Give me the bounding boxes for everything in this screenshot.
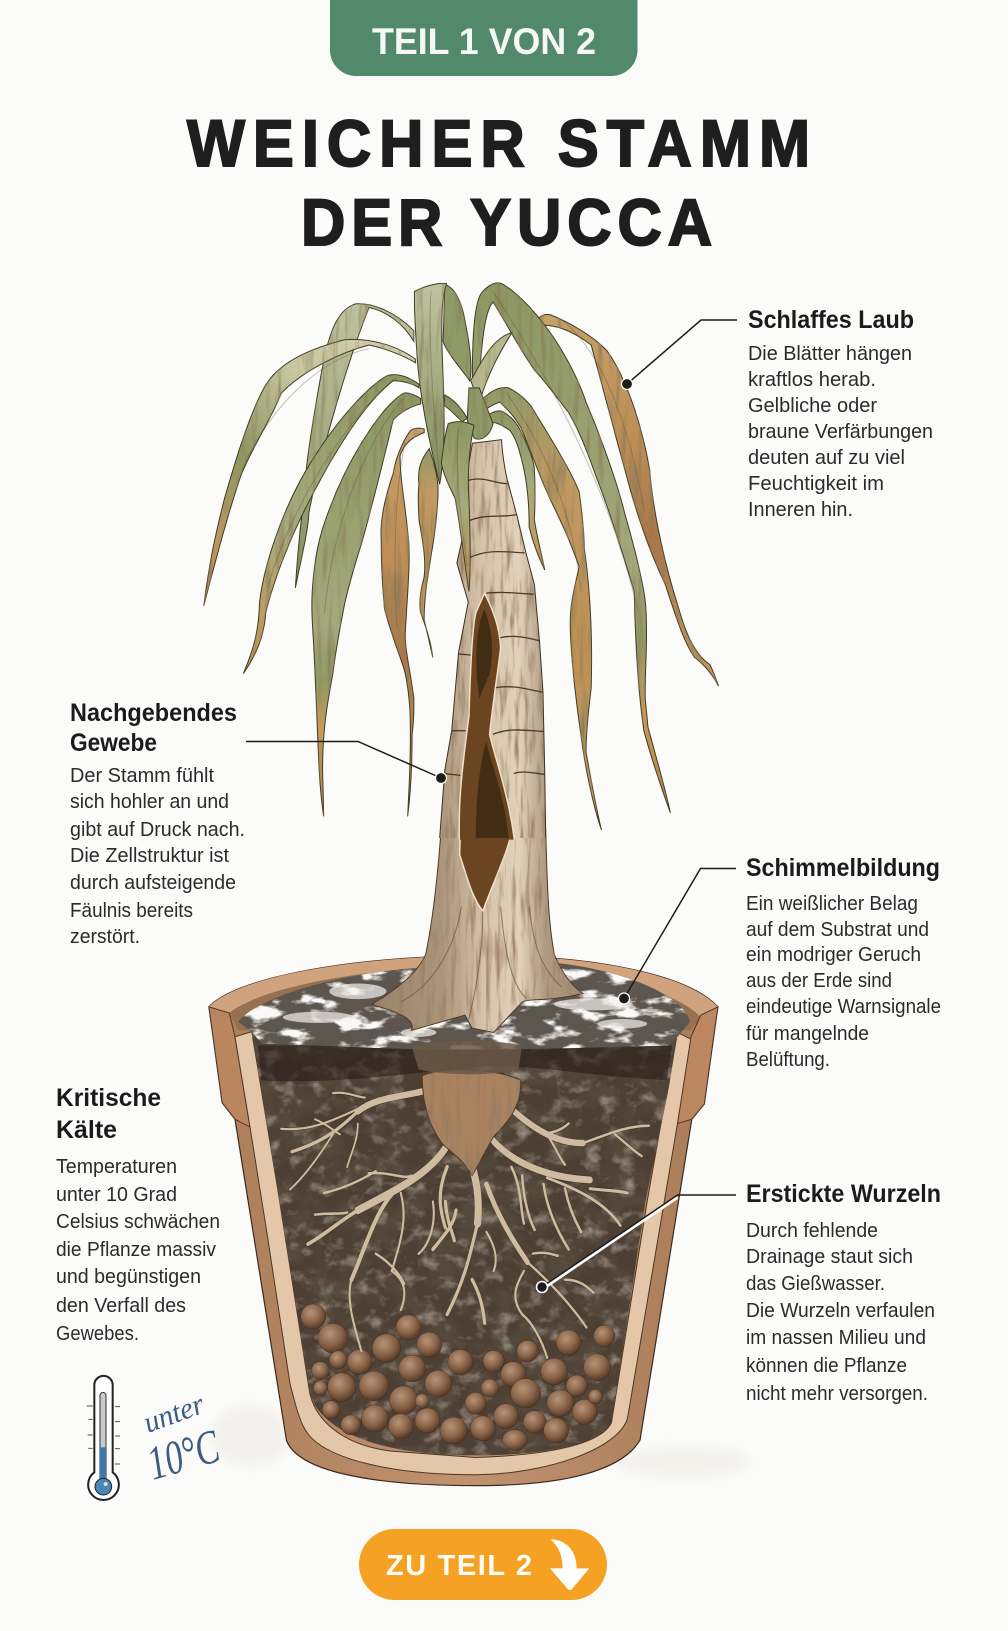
far right brown leaf xyxy=(534,314,719,686)
title: WEICHER STAMM xyxy=(187,106,810,180)
left rim section xyxy=(209,1007,250,1127)
callout: Schimmelbildung: ein modriger Geruch xyxy=(746,944,921,966)
callout: Schimmelbildung: eindeutige Warnsignale xyxy=(746,996,941,1018)
button: Zu Teil 2 xyxy=(359,1529,607,1600)
soil dark band xyxy=(258,1045,672,1081)
button: Zu Teil 2: ZU TEIL 2 xyxy=(386,1550,532,1582)
stem base in soil xyxy=(411,1041,522,1074)
upright back center leaf xyxy=(443,284,471,381)
callout: Kritische Kälte: und begünstigen xyxy=(56,1266,201,1288)
callout: Nachgebendes Gewebe xyxy=(70,699,446,948)
callout: Schlaffes Laub: Feuchtigkeit im xyxy=(748,473,884,495)
small hanging leaf xyxy=(418,449,438,657)
callout: Nachgebendes Gewebe: Die Zellstruktur ist xyxy=(70,845,229,867)
callout: Erstickte Wurzeln: Die Wurzeln verfaulen xyxy=(746,1300,935,1322)
callout: Kritische Kälte: den Verfall des xyxy=(56,1295,186,1317)
callout: Schlaffes Laub: Gelbliche oder xyxy=(748,395,877,417)
center folded leaf xyxy=(414,283,447,484)
callout: Nachgebendes Gewebe: Nachgebendes xyxy=(70,699,237,727)
leaf veins xyxy=(242,291,645,627)
callout: Nachgebendes Gewebe: zerstört. xyxy=(70,926,140,948)
callout: Schlaffes Laub xyxy=(622,306,933,521)
illustration: yucca crown and trunk xyxy=(204,283,719,840)
mid right tan leaf xyxy=(479,388,601,830)
callout: Nachgebendes Gewebe: Der Stamm fühlt xyxy=(70,765,214,787)
crown small leaves xyxy=(444,332,512,439)
callout: Schimmelbildung: auf dem Substrat und xyxy=(746,919,929,941)
brown hanging leaf xyxy=(381,428,424,816)
callout: Kritische Kälte: Celsius schwächen xyxy=(56,1211,220,1233)
callout: Schimmelbildung: Schimmelbildung xyxy=(746,854,940,882)
callout: Nachgebendes Gewebe: durch aufsteigende xyxy=(70,872,236,894)
callout: Schlaffes Laub: deuten auf zu viel xyxy=(748,447,905,469)
roots xyxy=(281,1091,649,1358)
callout: Kritische Kälte: die Pflanze massiv xyxy=(56,1239,216,1261)
handwritten label: unter 10 °C xyxy=(139,1387,226,1491)
callout: Erstickte Wurzeln: Durch fehlende xyxy=(746,1220,878,1242)
callout: Schimmelbildung: Belüftung. xyxy=(746,1049,830,1071)
root crown xyxy=(422,1070,521,1176)
callout: Kritische Kälte: unter 10 Grad xyxy=(56,1184,177,1206)
callout: Erstickte Wurzeln: können die Pflanze xyxy=(746,1355,907,1377)
soil xyxy=(252,1035,677,1455)
back rim xyxy=(209,955,718,1017)
callout: Kritische Kälte: Temperaturen xyxy=(56,1156,177,1178)
callout: Schimmelbildung: aus der Erde sind xyxy=(746,970,892,992)
callout: Kritische Kälte: Kritische xyxy=(56,1084,161,1112)
callout: Nachgebendes Gewebe: Gewebe xyxy=(70,729,157,757)
handwritten label: unter 10 °C: 10°C xyxy=(141,1420,226,1491)
far left long leaf xyxy=(204,339,416,606)
callout: Erstickte Wurzeln: im nassen Milieu und xyxy=(746,1327,926,1349)
trunk xyxy=(440,440,546,840)
inner back wall xyxy=(229,967,701,1030)
title xyxy=(187,106,810,259)
callout: Nachgebendes Gewebe: Fäulnis bereits xyxy=(70,900,193,922)
callout: Kritische Kälte: Kälte xyxy=(56,1116,117,1144)
pot cut section xyxy=(235,1032,691,1475)
small inner leaf xyxy=(483,411,545,570)
handwritten label: unter 10 °C: unter xyxy=(139,1387,209,1440)
pot silhouette xyxy=(209,955,718,1486)
callout: Nachgebendes Gewebe: gibt auf Druck nach. xyxy=(70,819,245,841)
illustration: pot with soil and roots xyxy=(209,820,751,1486)
front leaf xyxy=(441,422,474,591)
banner: Teil 1 von 2 xyxy=(330,0,638,76)
hollow rotten cavity xyxy=(459,593,514,840)
callout: Kritische Kälte: Gewebes. xyxy=(56,1323,139,1345)
callout: Erstickte Wurzeln xyxy=(536,1180,941,1405)
left long green and amber leaf xyxy=(312,393,421,816)
callout: Erstickte Wurzeln: nicht mehr versorgen. xyxy=(746,1383,928,1405)
banner: Teil 1 von 2: TEIL 1 VON 2 xyxy=(372,21,596,62)
callout: Schlaffes Laub: Die Blätter hängen xyxy=(748,343,912,365)
callout: Schimmelbildung: für mangelnde xyxy=(746,1023,869,1045)
icon: thermometer xyxy=(87,1376,120,1500)
callout: Erstickte Wurzeln: Drainage staut sich xyxy=(746,1246,913,1268)
callout: Nachgebendes Gewebe: sich hohler an und xyxy=(70,791,229,813)
callout: Schimmelbildung: Ein weißlicher Belag xyxy=(746,893,918,915)
clay pebble layer xyxy=(301,1304,615,1451)
callout: Schlaffes Laub: braune Verfärbungen xyxy=(748,421,933,443)
title: DER YUCCA xyxy=(301,185,712,259)
callout: Schlaffes Laub: Schlaffes Laub xyxy=(748,306,914,334)
callout: Schlaffes Laub: kraftlos herab. xyxy=(748,369,876,391)
soil surface xyxy=(238,963,690,1050)
ground shadow xyxy=(211,1405,751,1477)
right green long leaf xyxy=(472,283,670,813)
callout: Erstickte Wurzeln: das Gießwasser. xyxy=(746,1273,885,1295)
white mold patches xyxy=(283,983,647,1037)
callout: Schlaffes Laub: Inneren hin. xyxy=(748,499,853,521)
icon: down arrow xyxy=(550,1539,589,1590)
callout: Kritische Kälte xyxy=(56,1084,220,1345)
callout: Schimmelbildung xyxy=(618,854,941,1071)
callout: Erstickte Wurzeln: Erstickte Wurzeln xyxy=(746,1180,941,1208)
back left leaf xyxy=(295,304,414,588)
lower trunk xyxy=(372,820,583,1032)
left leaf xyxy=(243,375,419,674)
right rim section xyxy=(677,1007,718,1124)
